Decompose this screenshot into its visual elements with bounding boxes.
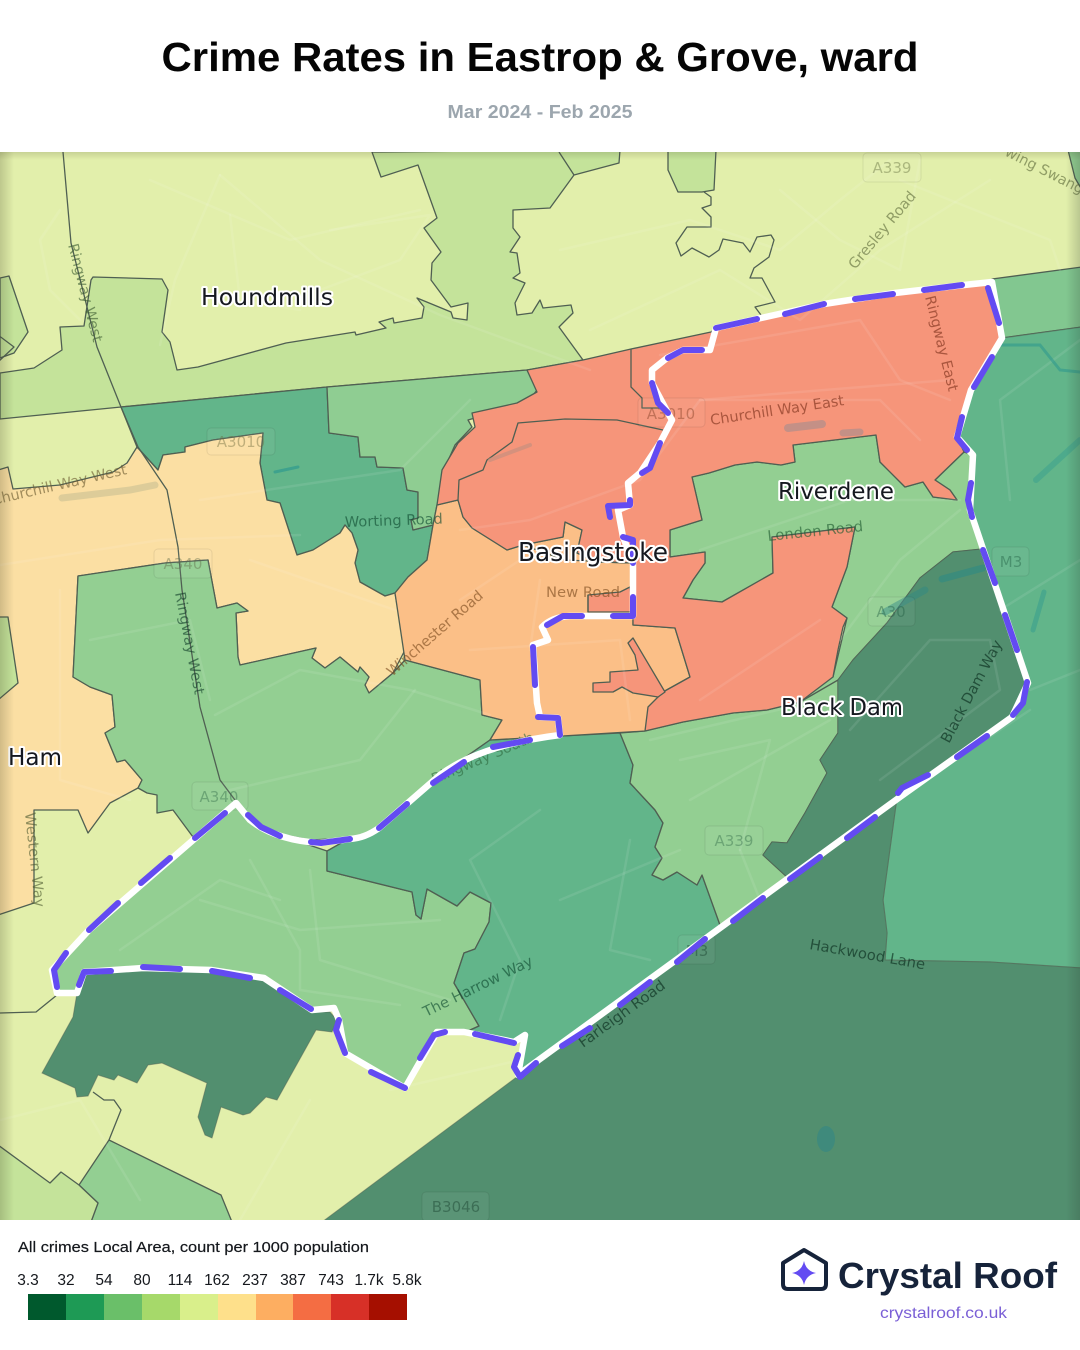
shield: A3010 west: A3010 xyxy=(217,433,265,451)
map base: lowest-lime background xyxy=(0,152,1080,1220)
road label: Ringway South: Ringway South xyxy=(429,730,537,788)
zone: salmon wedge south xyxy=(593,638,665,697)
legend xyxy=(17,1239,422,1320)
shield: M3 east xyxy=(992,547,1029,576)
zone: north mid-lime band xyxy=(0,150,620,419)
legend scale values: 1.7k xyxy=(354,1272,384,1289)
ward outline: purple dashes xyxy=(54,285,1027,1088)
zone: north-east green beyond ward corner xyxy=(992,267,1080,338)
road label: Western Way: Western Way xyxy=(21,812,47,908)
road label: Ringway West north: Ringway West xyxy=(64,242,105,344)
road label: Churchill Way East: Churchill Way East xyxy=(709,393,845,429)
legend scale values: 32 xyxy=(57,1272,75,1289)
icon: house with star xyxy=(783,1250,826,1289)
map edge vignette xyxy=(0,152,1080,1220)
place label: Ham: Ham xyxy=(8,745,62,771)
zone: mid green by Worting Road xyxy=(327,370,537,530)
zone: salmon high crime xyxy=(437,282,1002,731)
logo wordmark: Crystal Roof xyxy=(838,1255,1058,1296)
shield: M3 east: M3 xyxy=(1000,553,1022,571)
zone: ward west mid green xyxy=(52,803,491,1088)
road label: Winchester Road: Winchester Road xyxy=(384,588,487,680)
legend scale values: 114 xyxy=(168,1272,193,1289)
boundary lines inside zones xyxy=(0,152,775,1140)
zone: dark green south-east xyxy=(322,797,1080,1222)
shield: A340 north: A340 xyxy=(164,555,202,573)
shield: M3 south xyxy=(678,935,715,964)
zone: far-left mid-lime blob xyxy=(0,276,28,358)
zone: north blob mid-lime xyxy=(668,150,716,192)
title: Crime Rates in Eastrop & Grove, ward xyxy=(162,34,918,80)
road label: Ringway East: Ringway East xyxy=(921,294,960,393)
place label: Houndmills: Houndmills xyxy=(201,285,333,311)
shield: B3046 xyxy=(422,1192,489,1221)
zone: peach city centre xyxy=(395,500,690,740)
streets: faint road network xyxy=(89,174,1080,1201)
road label: Farleigh Road: Farleigh Road xyxy=(576,978,669,1051)
zone: south mid green A339 xyxy=(620,680,838,925)
road label: Black Dam Way: Black Dam Way xyxy=(938,637,1006,746)
shield: A339 north xyxy=(863,153,921,182)
legend scale values: 387 xyxy=(280,1272,306,1289)
place names xyxy=(8,285,903,771)
legend scale values: 54 xyxy=(95,1272,113,1289)
zone: central green xyxy=(327,733,720,1076)
shield: A3010 centre xyxy=(638,398,705,427)
shield: A340 north xyxy=(154,549,212,578)
shield: A340 south: A340 xyxy=(200,788,238,806)
road label: The Harrow Way: The Harrow Way xyxy=(420,953,536,1021)
place label: Basingstoke: Basingstoke xyxy=(518,538,668,568)
road name labels xyxy=(0,144,1080,1051)
road label: Worting Road: Worting Road xyxy=(345,512,443,531)
legend scale values: 5.8k xyxy=(392,1272,422,1289)
zone: dark green south-west estate xyxy=(42,966,337,1138)
subtitle: date range: Mar 2024 - Feb 2025 xyxy=(448,102,632,122)
zone: south-west mid-lime xyxy=(0,1145,98,1222)
zone: east green xyxy=(883,327,1080,968)
shield: A340 south xyxy=(192,782,248,810)
legend title: All crimes Local Area, count per 1000 population xyxy=(18,1239,369,1256)
zone: east mid green Riverdene xyxy=(670,436,980,698)
ward boundary xyxy=(52,282,1028,1088)
legend scale values: 237 xyxy=(242,1272,268,1289)
legend scale values: 162 xyxy=(204,1272,230,1289)
road label: New Road: New Road xyxy=(546,585,620,601)
zone: north-west green xyxy=(121,387,433,596)
logo: Crystal Roof xyxy=(783,1250,1058,1322)
place label: Black Dam: Black Dam xyxy=(781,695,903,721)
shield: A339 south: A339 xyxy=(715,832,753,850)
shield: A339 south xyxy=(705,826,763,855)
shield: A30 xyxy=(868,597,915,626)
zone: top right corner xyxy=(1068,150,1080,190)
zone: south mid green xyxy=(79,1140,232,1222)
zone: south-west mid green xyxy=(73,560,502,840)
shield: A339 north: A339 xyxy=(873,159,911,177)
panel: choropleth map xyxy=(0,144,1080,1222)
shield: M3 south: M3 xyxy=(686,942,708,960)
shield: B3046: B3046 xyxy=(432,1198,480,1216)
ward outline: white casing xyxy=(52,282,1028,1088)
legend scale values: 743 xyxy=(318,1272,344,1289)
features: water and dark patches xyxy=(62,345,1080,1152)
zone: west tan xyxy=(0,433,405,915)
zone: dark green Black Dam xyxy=(763,549,1028,877)
legend scale values xyxy=(17,1272,422,1289)
zone: salmon patch New Road xyxy=(588,587,633,612)
road shields xyxy=(154,153,1029,1221)
legend scale values: 80 xyxy=(133,1272,151,1289)
shield: A3010 centre: A3010 xyxy=(647,405,695,423)
zone: west edge mid-lime blob xyxy=(0,617,18,700)
shield: A3010 west xyxy=(207,428,275,455)
legend colour bar xyxy=(28,1294,407,1320)
shield: A30: A30 xyxy=(876,603,906,621)
logo url: crystalroof.co.uk xyxy=(880,1305,1008,1322)
zones: crime rate areas xyxy=(0,150,1080,1222)
road label: Ringway West south: Ringway West xyxy=(171,591,207,696)
road label: Gresley Road: Gresley Road xyxy=(846,189,920,273)
road label: London Road: London Road xyxy=(767,519,864,545)
place label: Riverdene: Riverdene xyxy=(778,479,894,505)
road label: Hackwood Lane: Hackwood Lane xyxy=(808,937,926,973)
legend scale values: 3.3 xyxy=(17,1272,39,1289)
